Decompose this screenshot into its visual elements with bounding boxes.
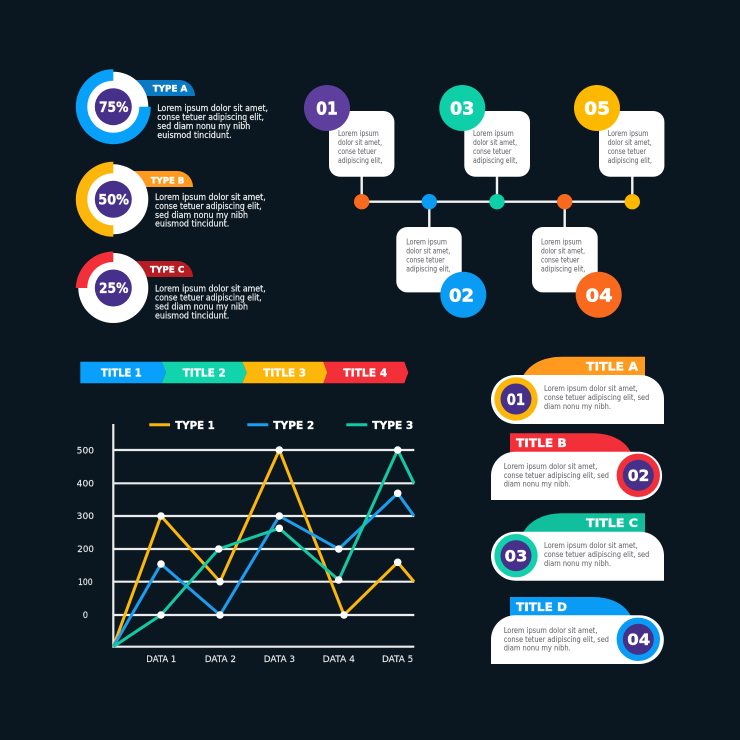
y axis labels: 0: [83, 611, 88, 621]
arrow: title 1: TITLE 1: [101, 367, 142, 380]
step 01: 01: [316, 99, 338, 120]
card: title B: TITLE B: [516, 436, 567, 450]
y axis labels: 300: [77, 512, 94, 522]
arrow bar: titles 1 to 4: [80, 362, 408, 383]
card: title A: 01: [507, 390, 525, 409]
tab: type C: TYPE C: [150, 265, 185, 275]
card: title A: Lorem ipsum dolor sit amet,: [544, 384, 638, 393]
donut chart: 75%: [76, 69, 151, 144]
donut chart: 50%: 50%: [98, 192, 129, 208]
arrow: title 3: [242, 362, 327, 383]
donut chart: 25%: [76, 251, 148, 323]
step 04: 04: [586, 285, 613, 306]
card: title C: diam nonu my nibh.: [544, 559, 611, 568]
timeline connectors: [362, 176, 632, 228]
step 03: Lorem ipsum: [473, 129, 514, 138]
step 01: [304, 85, 394, 177]
arrow: title 3: TITLE 3: [263, 367, 306, 380]
step 02: 02: [449, 285, 474, 306]
text block: type C: Lorem ipsum dolor sit amet,: [155, 284, 266, 294]
panel: percentage donuts: [76, 69, 268, 323]
card: title C: conse tetuer adipiscing elit, sed: [544, 550, 649, 559]
y axis labels: 500: [77, 446, 94, 456]
x axis labels: [146, 655, 413, 665]
legend: TYPE 1: [175, 419, 215, 432]
step 05: [574, 85, 664, 177]
panel: title cards: [491, 357, 664, 664]
arrow: title 2: TITLE 2: [183, 367, 226, 380]
step 03: 03: [450, 99, 474, 120]
arrow: title 1: [80, 362, 166, 383]
panel: numbered timeline: [304, 85, 664, 318]
data points: [157, 446, 402, 619]
card: title D: conse tetuer adipiscing elit, sed: [504, 635, 609, 644]
step 02: dolor sit amet,: [406, 246, 450, 256]
x axis labels: DATA 1: [146, 655, 176, 665]
arrow: title 4: TITLE 4: [343, 367, 388, 380]
card: title B: [491, 433, 662, 500]
step 04: conse tetuer: [541, 256, 580, 264]
text block: type C: sed diam nonu my nibh: [155, 302, 248, 312]
text block: type C: conse tetuer adipiscing elit,: [155, 293, 262, 303]
donut item: type C: [76, 251, 266, 323]
step 05: conse tetuer: [608, 147, 647, 156]
series: type 1: [113, 450, 414, 647]
step 03: dolor sit amet,: [473, 138, 517, 147]
card: title D: diam nonu my nibh.: [504, 644, 571, 652]
step 05: dolor sit amet,: [608, 138, 652, 147]
step 01: adipiscing elit,: [338, 156, 382, 165]
card: title B: diam nonu my nibh.: [504, 480, 571, 488]
card: title C: 03: [505, 546, 527, 566]
card: title D: Lorem ipsum dolor sit amet,: [504, 626, 597, 635]
card: title B: conse tetuer adipiscing elit, sed: [504, 471, 609, 480]
card: title D: [491, 597, 664, 664]
text block: type A: euismod tincidunt.: [157, 130, 232, 140]
step 05: Lorem ipsum: [608, 129, 648, 138]
legend: TYPE 3: [372, 419, 413, 432]
step 04: [532, 227, 622, 318]
donut chart: 50%: [76, 162, 148, 237]
text block: type C: euismod tincidunt.: [155, 310, 229, 320]
arrow: title 2: [162, 362, 247, 383]
tab: type C: [130, 261, 193, 277]
card: title D: 04: [627, 630, 650, 649]
donut item: type B: [76, 162, 266, 237]
card: title A: TITLE A: [586, 359, 638, 373]
text block: type A: [157, 103, 268, 140]
legend: TYPE 2: [273, 419, 314, 432]
card: title C: TITLE C: [586, 516, 638, 530]
y axis labels: 400: [77, 479, 94, 489]
y axis labels: [77, 446, 94, 621]
text block: type A: sed diam nonu my nibh: [157, 121, 250, 131]
x axis labels: DATA 5: [382, 655, 413, 665]
y axis labels: 100: [78, 578, 93, 588]
tab: type B: [130, 171, 193, 187]
step 02: Lorem ipsum: [406, 238, 447, 246]
donut item: type A: [76, 69, 268, 144]
donut chart: 25%: 25%: [99, 281, 128, 297]
step 04: dolor sit amet,: [541, 246, 585, 256]
line chart: [77, 419, 414, 665]
series: type 3: [113, 450, 414, 647]
text block: type B: Lorem ipsum dolor sit amet,: [155, 192, 266, 202]
card: title C: [491, 513, 664, 581]
step 05: 05: [584, 99, 610, 120]
step 01: conse tetuer: [338, 147, 377, 156]
step 03: [439, 85, 530, 177]
step 01: Lorem ipsum: [338, 129, 379, 138]
series: type 2: [113, 493, 414, 647]
text block: type B: conse tetuer adipiscing elit,: [155, 201, 262, 211]
card: title A: conse tetuer adipiscing elit, sed: [544, 393, 649, 402]
card: title D: TITLE D: [516, 600, 567, 614]
x axis labels: DATA 3: [264, 655, 295, 665]
tab: type A: TYPE A: [153, 85, 187, 95]
card: title B: Lorem ipsum dolor sit amet,: [504, 462, 597, 471]
legend: [149, 419, 413, 432]
arrow: title 4: [323, 362, 408, 383]
y axis labels: 200: [77, 545, 94, 555]
step 03: conse tetuer: [473, 147, 512, 156]
step 04: adipiscing elit,: [541, 264, 585, 274]
step 03: adipiscing elit,: [473, 156, 517, 165]
text block: type A: conse tetuer adipiscing elit,: [157, 112, 264, 122]
step 02: [396, 227, 486, 318]
text block: type B: euismod tincidunt.: [155, 219, 229, 229]
axes and grid: [113, 424, 414, 648]
step 04: Lorem ipsum: [541, 238, 582, 246]
step 02: conse tetuer: [406, 256, 445, 264]
card: title A: [491, 357, 664, 424]
donut chart: 75%: 75%: [99, 100, 128, 116]
text block: type A: Lorem ipsum dolor sit amet,: [157, 103, 268, 113]
timeline nodes: [354, 194, 640, 209]
step 02: adipiscing elit,: [406, 264, 451, 274]
text block: type B: [155, 192, 266, 229]
text block: type B: sed diam nonu my nibh: [155, 210, 248, 220]
x axis labels: DATA 4: [323, 655, 355, 665]
step 01: dolor sit amet,: [338, 138, 382, 147]
step 05: adipiscing elit,: [608, 156, 652, 165]
text block: type C: [155, 284, 266, 320]
x axis labels: DATA 2: [205, 655, 236, 665]
card: title B: 02: [628, 466, 649, 485]
tab: type B: TYPE B: [151, 176, 184, 186]
card: title A: diam nonu my nibh.: [544, 402, 611, 411]
card: title C: Lorem ipsum dolor sit amet,: [544, 541, 638, 550]
tab: type A: [130, 80, 195, 96]
